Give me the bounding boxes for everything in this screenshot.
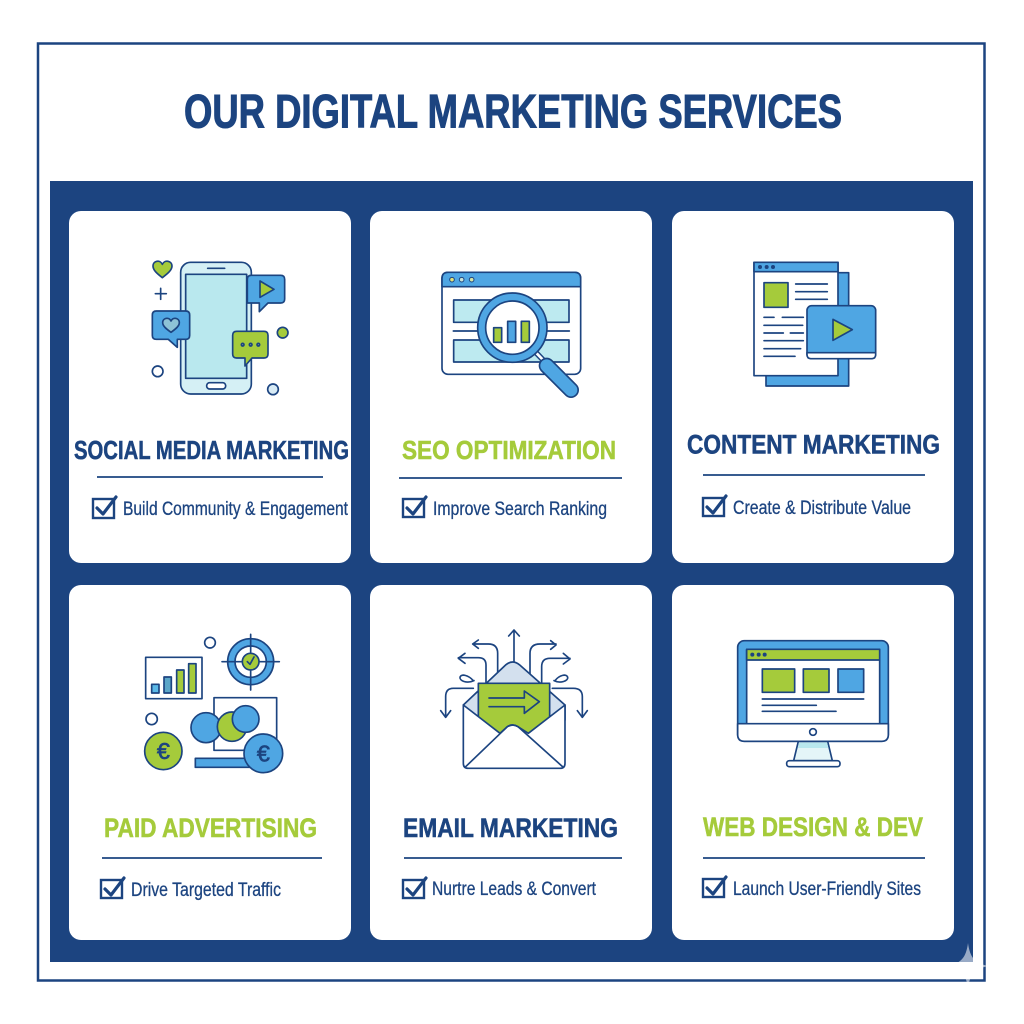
card: content marketing [672,211,954,563]
checkbox [93,497,116,518]
title: OUR DIGITAL MARKETING SERVICES [184,84,842,138]
heading: social media marketing: SOCIAL MEDIA MARKETING [74,435,349,465]
checkbox [403,878,426,898]
icon: chart, target and coins: € [157,738,170,764]
icon: phone with social bubbles [152,261,288,395]
heading: seo optimization: SEO OPTIMIZATION [402,435,616,465]
icon: envelope with arrows [441,630,587,768]
benefit text: Create & Distribute Value [733,498,911,519]
icon: document and video [754,262,876,386]
benefit text: Launch User-Friendly Sites [733,879,921,900]
heading: email marketing: EMAIL MARKETING [403,813,618,843]
icon: browser with magnifier [442,272,581,390]
card: social media marketing [69,211,351,563]
benefit text: Drive Targeted Traffic [131,880,281,901]
watermark sparkle [948,943,988,988]
icon: chart, target and coins: € [257,740,270,766]
benefit text: Build Community & Engagement [123,499,349,520]
card: web design and dev [672,585,954,940]
benefit text: Improve Search Ranking [433,499,607,520]
heading: paid advertising: PAID ADVERTISING [104,813,317,843]
icon: chart, target and coins [145,634,283,773]
checkbox [703,496,726,516]
benefit text: Nurtre Leads & Convert [432,879,597,900]
icon: desktop monitor [738,641,888,767]
heading: web design and dev: WEB DESIGN & DEV [703,812,923,842]
card: paid advertising [69,585,351,940]
panel: services background [50,181,973,962]
card: seo optimization [370,211,652,563]
heading: content marketing: CONTENT MARKETING [687,430,940,460]
checkbox [101,878,124,898]
checkbox [703,877,726,897]
checkbox [403,497,426,517]
card: email marketing [370,585,652,940]
